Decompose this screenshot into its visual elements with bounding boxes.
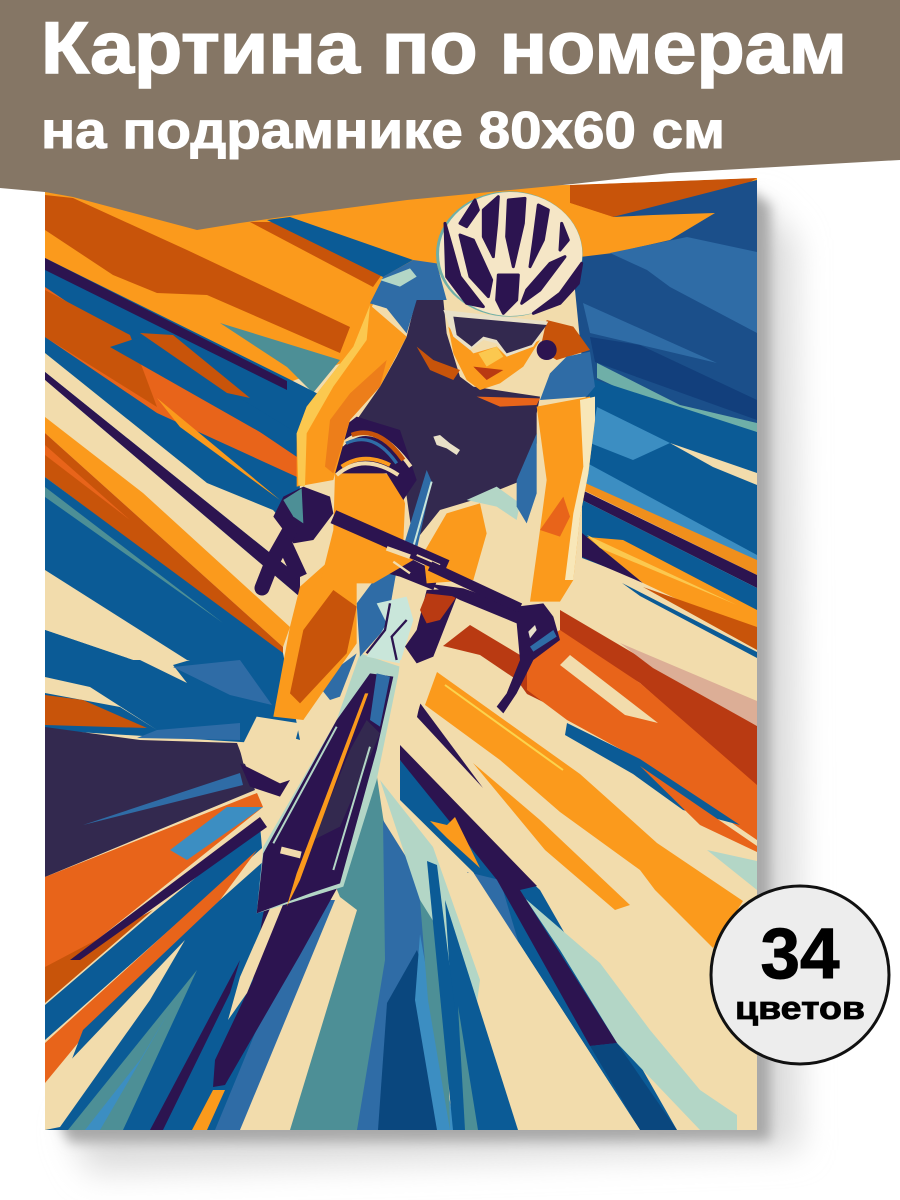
upper body, drawn in detail coordinates bbox=[273, 191, 595, 602]
helmet bbox=[436, 191, 583, 317]
right shoulder bbox=[540, 320, 590, 360]
badge label: цветов bbox=[735, 990, 865, 1026]
chest accents bbox=[417, 347, 460, 380]
left shoe bbox=[240, 717, 300, 780]
thigh stripes bbox=[337, 433, 411, 475]
badge number: 34 bbox=[761, 915, 840, 994]
left thigh bbox=[320, 467, 413, 583]
bicycle front wheel bbox=[213, 863, 340, 1087]
sunglasses bbox=[443, 310, 548, 357]
left arm bbox=[297, 305, 407, 487]
left shoulder bbox=[370, 260, 447, 333]
ear bbox=[537, 340, 557, 360]
upper right bbox=[600, 178, 757, 217]
left brake lever bbox=[262, 530, 300, 588]
right knee band bbox=[467, 487, 520, 520]
fork and frame bbox=[257, 563, 413, 913]
lower body and bike, drawn in detail coordinates bbox=[240, 553, 560, 913]
painting: cyclist on canvas bbox=[45, 170, 757, 1135]
handlebar connection to right hand bbox=[430, 566, 520, 608]
title: Картина по номерам bbox=[41, 8, 847, 89]
badge: 34 colours bbox=[711, 886, 889, 1064]
bottom right rays bbox=[400, 760, 677, 1130]
right arm bbox=[530, 397, 595, 602]
bike stem bbox=[403, 470, 432, 550]
canvas shadow bbox=[60, 190, 800, 1172]
right streaks bbox=[443, 625, 543, 702]
painting background streaks bbox=[45, 170, 757, 1135]
left calf bbox=[273, 560, 357, 720]
blue background patch by calf bbox=[317, 653, 357, 700]
torso bbox=[343, 297, 540, 543]
face bbox=[448, 327, 540, 390]
subtitle: на подрамнике 80х60 см bbox=[41, 102, 725, 160]
right calf bbox=[405, 588, 460, 663]
banner bbox=[0, 0, 900, 230]
upper left bbox=[45, 170, 600, 383]
right foot bbox=[390, 660, 430, 732]
hip shadow behind stripes bbox=[335, 417, 417, 500]
bottom left bbox=[45, 677, 157, 730]
right leg bbox=[480, 500, 537, 583]
saddle logo bbox=[433, 435, 460, 455]
cyclist bbox=[213, 191, 595, 1087]
handlebar right and hood bbox=[427, 583, 560, 713]
left hand on handlebar bbox=[273, 487, 447, 573]
